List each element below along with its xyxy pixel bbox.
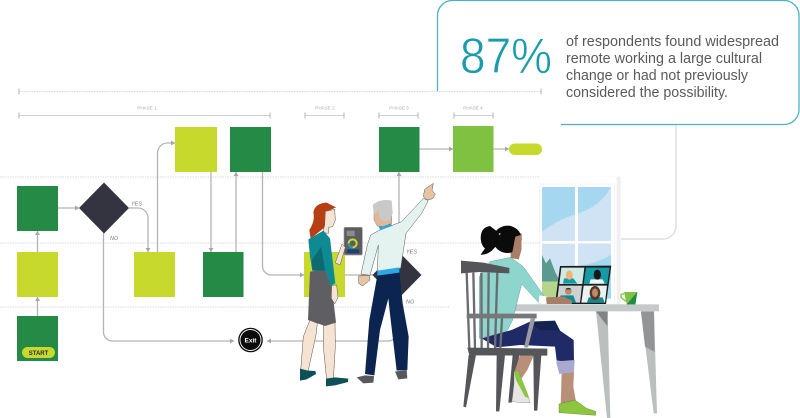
laptop with video call	[555, 266, 611, 304]
start box	[17, 316, 58, 361]
phase markers: PHASE 3	[389, 106, 409, 110]
chair back legs	[463, 355, 519, 407]
chair frame	[461, 261, 547, 411]
desk top	[515, 304, 659, 311]
pants	[482, 322, 574, 362]
connectors	[35, 140, 509, 344]
tablet	[344, 227, 362, 255]
start box: START	[29, 351, 49, 357]
callout text: of respondents found widespread	[566, 33, 779, 50]
lower leg	[561, 372, 576, 405]
hair	[481, 226, 522, 259]
mug	[621, 292, 637, 304]
neck and face	[511, 233, 522, 259]
illustration: standing woman	[300, 203, 362, 386]
exit node	[238, 328, 263, 352]
phase markers: PHASE 2	[315, 106, 335, 110]
yes and no labels: NO	[110, 236, 119, 242]
desk legs	[596, 311, 657, 418]
illustration: standing man pointing	[357, 183, 435, 383]
grey rounded panel behind the office scene	[560, 124, 676, 239]
callout text: considered the possibility.	[566, 84, 728, 101]
phase markers	[19, 88, 541, 118]
flowchart	[0, 88, 617, 418]
yes and no labels: YES	[406, 250, 417, 256]
phase markers: PHASE 4	[463, 106, 483, 110]
statistic: 87%: 87%	[460, 28, 552, 84]
far leg and shoe	[512, 355, 534, 403]
torso shirt	[479, 257, 543, 338]
callout text	[566, 33, 779, 101]
illustration: desk, mug and laptop	[515, 266, 659, 418]
exit node: Exit	[245, 338, 257, 344]
phase markers: PHASE 1	[137, 106, 157, 110]
rolled cuff	[556, 360, 575, 374]
shoe	[559, 400, 596, 415]
yes and no labels: YES	[131, 202, 142, 208]
illustration: seated woman on chair	[461, 226, 596, 415]
callout text: remote working a large cultural	[566, 50, 762, 67]
illustration: window	[539, 177, 621, 305]
callout: statistic panel	[438, 0, 799, 124]
yes and no labels	[110, 202, 417, 306]
yes and no labels: NO	[406, 300, 415, 306]
white flowchart sheet covering the callout corner	[0, 91, 561, 178]
callout text: change or had not previously	[566, 67, 748, 84]
decision diamonds	[79, 182, 422, 300]
process boxes	[17, 126, 542, 297]
